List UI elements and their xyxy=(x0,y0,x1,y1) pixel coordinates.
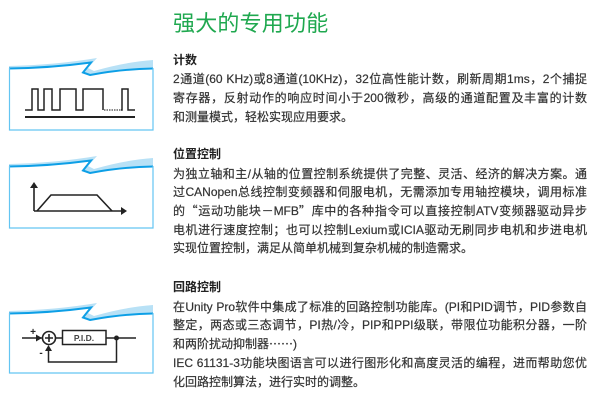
title: 强大的专用功能 xyxy=(173,11,328,36)
text: counting description: 和测量模式，轻松实现应用要求。 xyxy=(173,110,353,124)
text: position control description: 实现位置控制，满足从简单机械到复杂机械的制造需求。 xyxy=(173,241,473,255)
text: loop control description: 在Unity Pro软件中集成了标准的回路控制功能库。(PI和PID调节，PID参数自 xyxy=(173,300,587,314)
icon: PID loop xyxy=(8,303,154,374)
icon: PID loop: + xyxy=(30,327,36,338)
icon: PID loop: P.I.D. xyxy=(74,333,94,343)
icon: position control trapezoid xyxy=(8,156,154,229)
heading: position control: 位置控制 xyxy=(173,147,221,161)
text: position control description: 过CANopen总线控制变频器和伺服电机，无需添加专用轴控模块，调用标准 xyxy=(173,185,587,199)
icon: PID loop: - xyxy=(39,348,43,359)
text: loop control description: 和两阶扰动抑制器……) xyxy=(173,335,297,352)
heading: counting: 计数 xyxy=(173,53,197,67)
heading: loop control: 回路控制 xyxy=(173,280,221,294)
text: loop control description: 化回路控制算法，进行实时的调整。 xyxy=(173,375,365,389)
icon: counting pulse train xyxy=(8,58,154,131)
text: counting description: 2通道(60 KHz)或8通道(10KHz)，32位高性能计数，刷新周期1ms，2个捕捉 xyxy=(173,72,587,86)
text: loop control description: IEC 61131-3功能块图语言可以进行图形化和高度灵活的编程，进而帮助您优 xyxy=(173,356,587,370)
text: position control description xyxy=(173,167,587,255)
text: loop control description xyxy=(173,300,587,389)
text: position control description: 电机进行速度控制；也可以控制Lexium或ICIA驱动无刷同步电机和步进电机 xyxy=(173,223,587,237)
text: counting description xyxy=(173,72,587,124)
text: counting description: 寄存器，反射动作的响应时间小于200微秒，高级的通道配置及丰富的计数 xyxy=(173,91,587,105)
text: position control description: 的“运动功能块－MFB”库中的各种指令可以直接控制ATV变频器驱动异步 xyxy=(173,202,587,219)
text: loop control description: 整定，两态或三态调节，PI热/冷，PIP和PPI级联，带限位功能积分器，一阶 xyxy=(173,318,587,332)
text: position control description: 为独立轴和主/从轴的位置控制系统提供了完整、灵活、经济的解决方案。通 xyxy=(173,167,587,181)
